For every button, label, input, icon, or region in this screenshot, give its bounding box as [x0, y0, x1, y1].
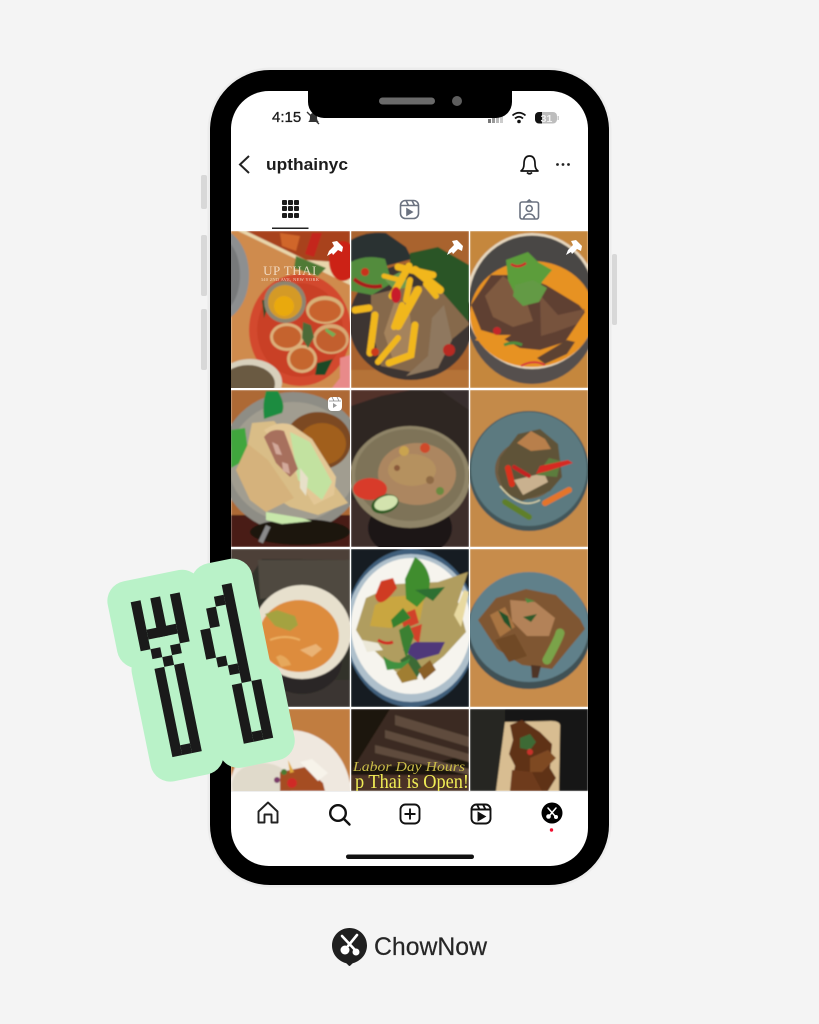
photo: glazed wings on tray	[470, 709, 588, 791]
bottom navigation	[231, 791, 588, 859]
icon: wifi	[512, 113, 526, 122]
caption: restaurant name on photo: UP THAI	[263, 263, 317, 278]
caption: announcement text: p Thai is Open!	[355, 771, 469, 793]
icon: cell signal	[488, 116, 503, 123]
status bar	[272, 109, 559, 126]
icon: reels	[472, 804, 490, 824]
icon: battery: 31	[541, 113, 552, 125]
icon: reels tab	[400, 200, 418, 218]
phone body	[208, 68, 612, 888]
active tab underline	[272, 228, 308, 229]
icon: grid tab	[282, 200, 299, 218]
icon: pin	[327, 241, 343, 256]
icon: create	[400, 804, 420, 824]
photo: roti wrap with curry dip	[231, 390, 350, 547]
infographic canvas	[107, 70, 617, 966]
profile header	[240, 155, 570, 174]
home indicator	[346, 854, 474, 859]
icon: muted bell	[307, 112, 319, 124]
photo: basil eggplant stir fry	[351, 549, 469, 707]
phone notch	[308, 91, 512, 118]
photo: fried rice on grey plate	[350, 390, 470, 558]
icon: reel badge	[328, 397, 342, 411]
profile tabs	[272, 200, 538, 229]
photo: curry soup bowl	[231, 549, 351, 707]
caption: restaurant name on photo: 340 2ND AVE, NEW YORK	[261, 277, 320, 283]
icon: pin	[447, 240, 463, 255]
sticker background	[104, 553, 298, 787]
photo: rice plate on wood table	[231, 709, 350, 791]
photo: stir fry in blue bowl	[469, 390, 589, 547]
caption: announcement text	[352, 762, 467, 791]
username: upthainyc	[266, 155, 348, 174]
photo: restaurant announcement	[351, 709, 469, 793]
icon: battery	[535, 112, 559, 125]
photo: soft shell crab curry	[470, 231, 588, 388]
clock: 4:15	[272, 109, 301, 126]
photo grid	[231, 231, 588, 791]
caption: announcement text: Labor Day Hours	[352, 760, 466, 775]
photo: crab cakes on red plate	[231, 231, 350, 388]
pixel knife	[192, 581, 273, 748]
icon: profile avatar	[542, 802, 562, 824]
icon: more dots	[556, 163, 570, 166]
icon: pin	[566, 240, 582, 255]
caption: restaurant name on photo	[261, 266, 319, 282]
wordmark: ChowNow	[374, 933, 488, 961]
phone side buttons	[201, 175, 617, 370]
icon: bell	[521, 156, 538, 174]
photo: drunken noodles in blue bowl	[467, 549, 591, 707]
notification dot	[550, 828, 553, 832]
speaker	[379, 98, 435, 104]
photo: crispy fish with mango	[349, 231, 473, 388]
ChowNow logo	[332, 928, 488, 966]
sticker: pixel fork and knife	[104, 553, 298, 787]
icon: home	[258, 802, 278, 822]
icon: tagged tab	[520, 200, 538, 219]
pixel fork	[131, 592, 212, 759]
camera	[452, 96, 462, 106]
icon: ChowNow pin	[332, 928, 367, 966]
icon: search	[330, 805, 350, 824]
icon: back chevron	[240, 156, 249, 173]
